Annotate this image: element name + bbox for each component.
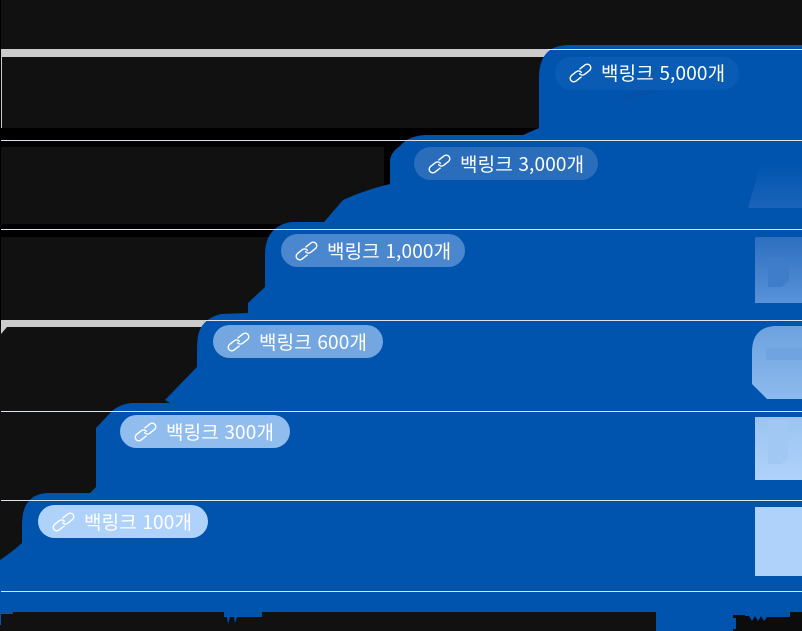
pill label: 백링크 5,000개 <box>601 59 725 86</box>
grade block E <box>755 507 802 576</box>
grey strip <box>1 49 802 57</box>
pill label: 백링크 300개 <box>166 418 274 445</box>
bottom right dark wordmark fragment <box>733 612 802 631</box>
row 5000: pill <box>555 57 739 90</box>
row 1000: pill <box>281 234 465 267</box>
grade block B <box>755 237 802 303</box>
icon: link <box>428 154 451 174</box>
row 100: pill <box>38 505 208 538</box>
top dark band <box>1 0 802 49</box>
pill label: 백링크 100개 <box>84 508 192 535</box>
row 300: pill <box>120 415 290 448</box>
pill label: 백링크 1,000개 <box>327 237 451 264</box>
pill label: 백링크 600개 <box>259 328 367 355</box>
dark block rows 3 to 6 <box>0 237 802 631</box>
row 3000: pill <box>414 147 598 180</box>
grade block C <box>752 326 802 399</box>
icon: link <box>227 332 250 352</box>
faint streak under top pill <box>612 90 665 105</box>
icon: link <box>52 512 75 532</box>
grade block D <box>755 417 802 480</box>
dark block row 1 <box>1 57 802 128</box>
dark block row 2 <box>1 147 384 224</box>
icon: link <box>569 63 592 83</box>
icon: link <box>134 422 157 442</box>
pill label: 백링크 3,000개 <box>460 150 584 177</box>
row 600: pill <box>213 325 383 358</box>
icon: link <box>295 241 318 261</box>
grade block A <box>748 163 802 208</box>
